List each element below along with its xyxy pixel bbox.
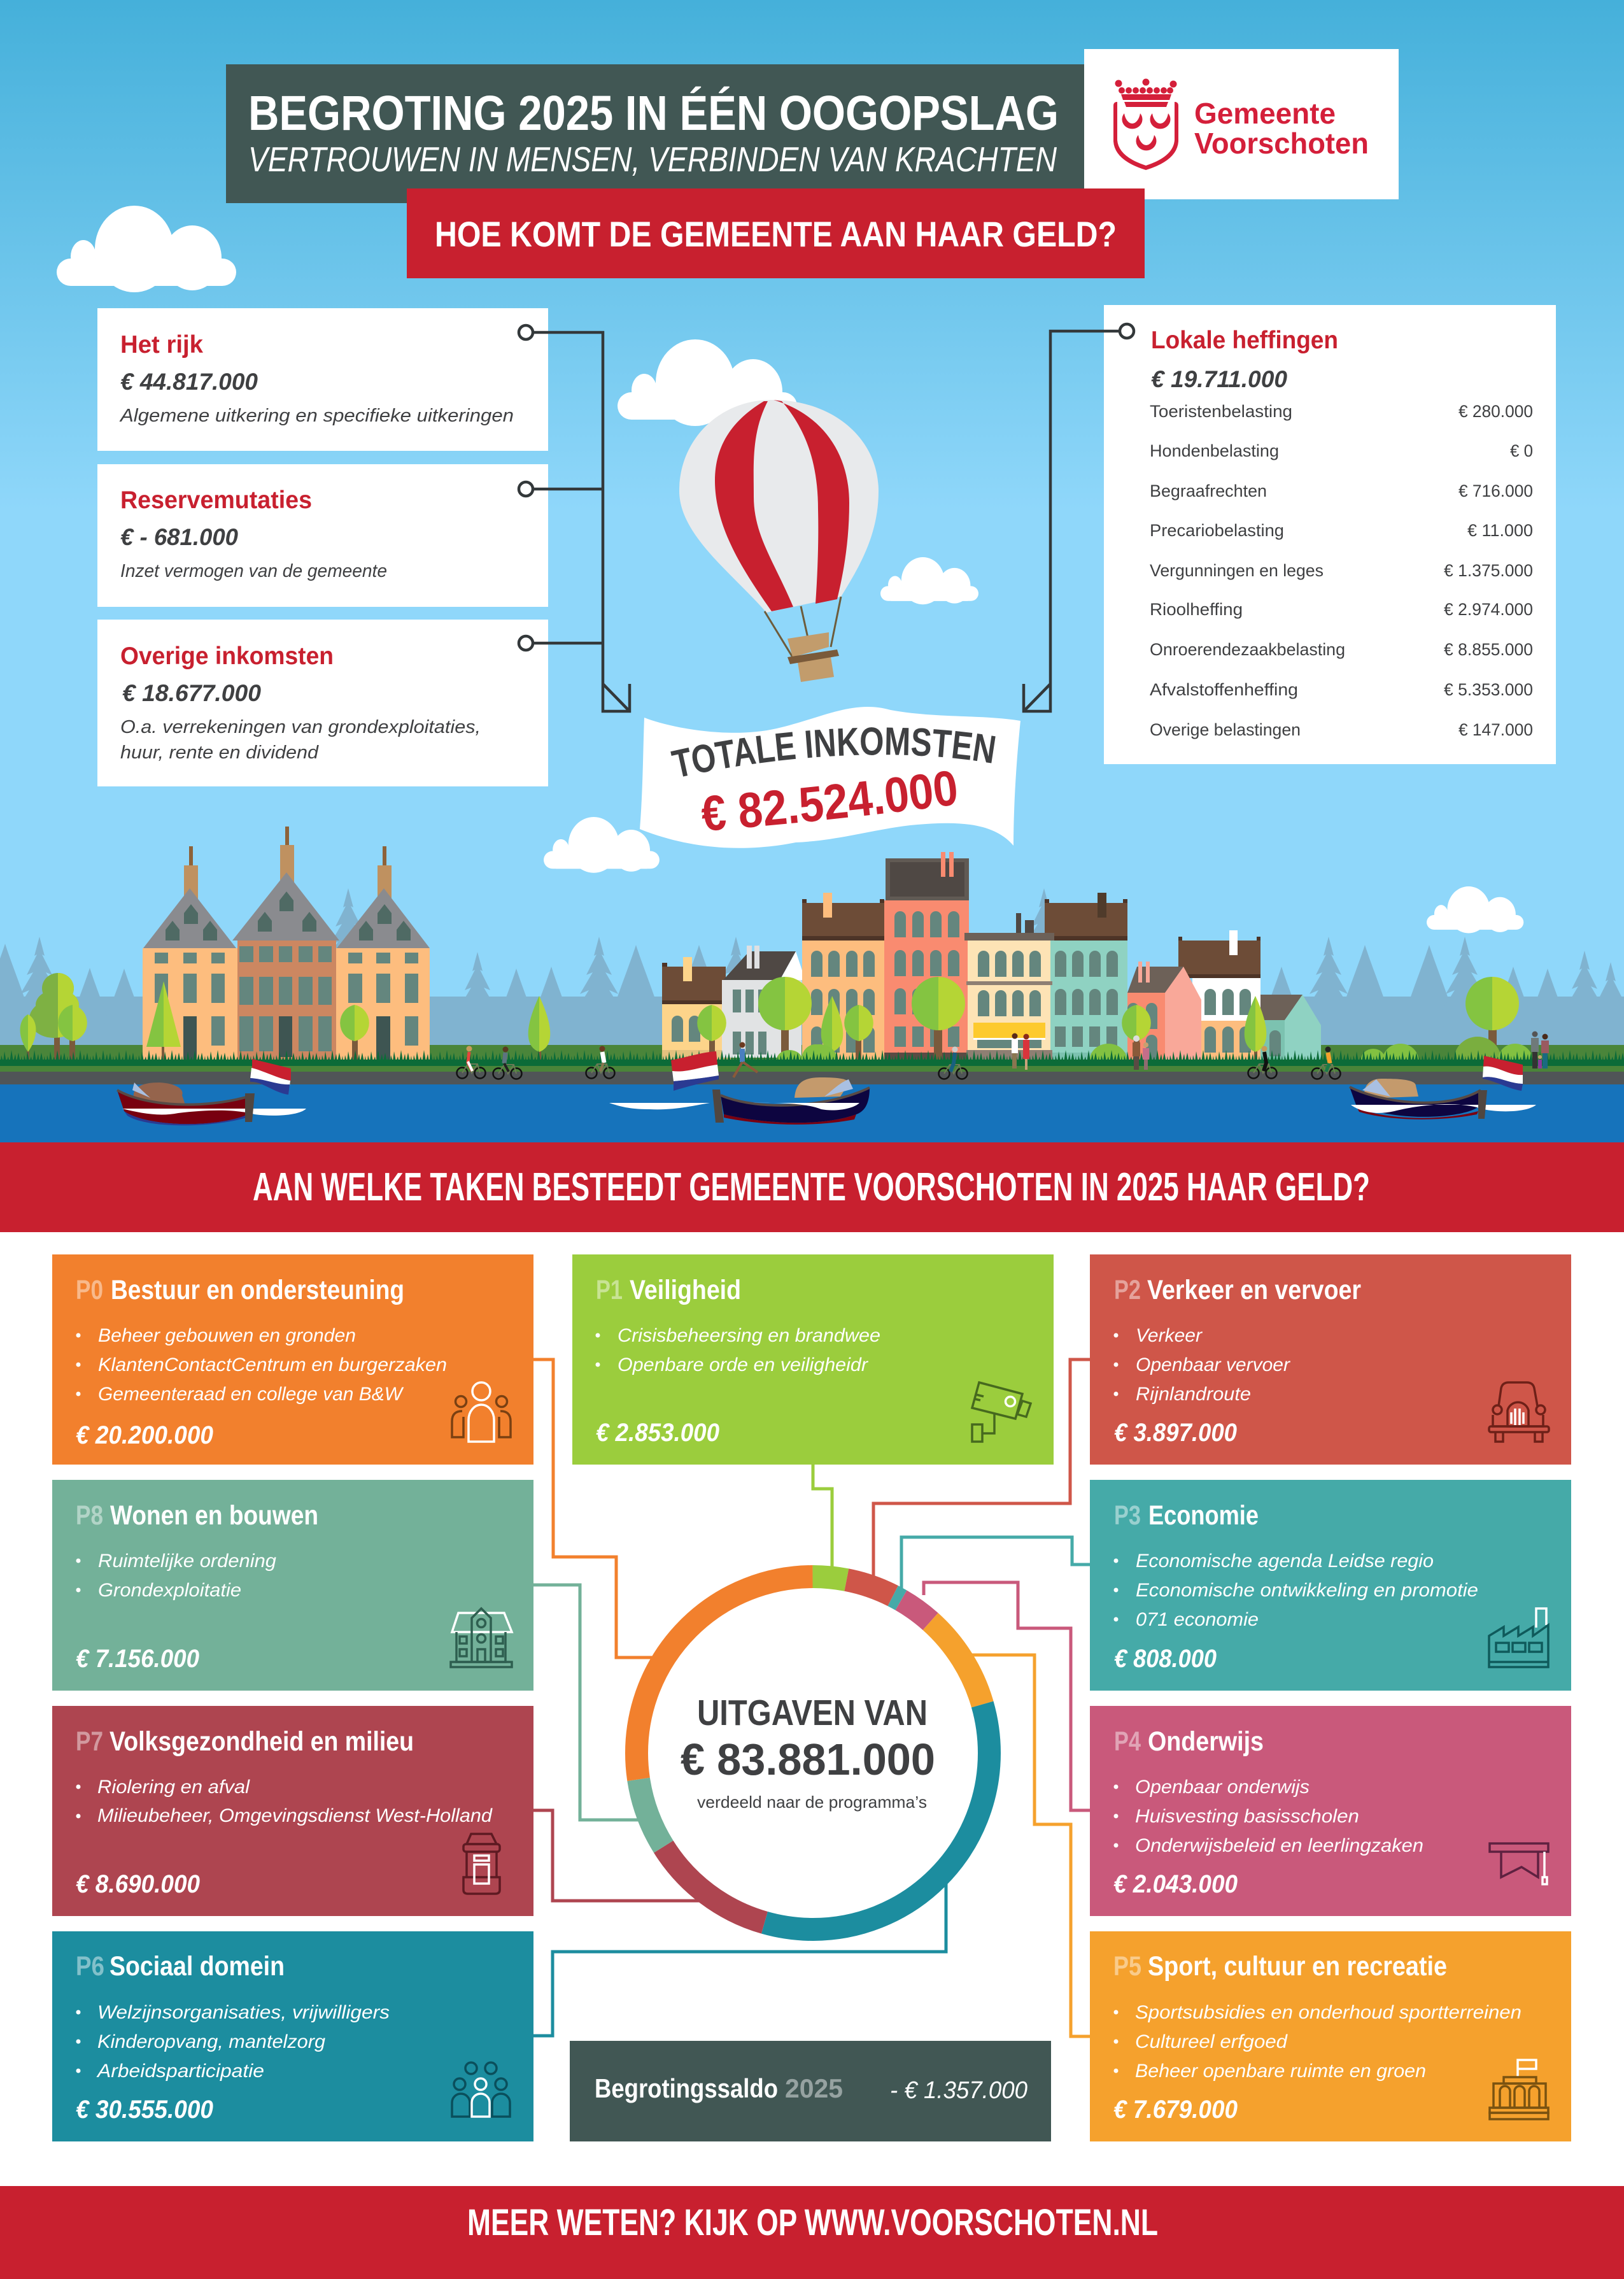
panel: P5 Sport, cultuur en recreatie: Sportsubsidies en onderhoud sportterreinen [1135, 2002, 1522, 2023]
banner: totale inkomsten: TOTALE INKOMSTEN [670, 727, 996, 777]
cyclist [1311, 1047, 1341, 1079]
panel: P4 Onderwijs: Openbaar onderwijs [1135, 1777, 1310, 1798]
panel: P8 Wonen en bouwen: Wonen en bouwen [110, 1500, 318, 1531]
panel: P0 Bestuur en ondersteuning: Bestuur en ondersteuning [111, 1275, 404, 1305]
panel: P7 Volksgezondheid en milieu: Volksgezondheid en milieu [109, 1726, 414, 1757]
panel: Lokale heffingen [1104, 305, 1556, 764]
house: salmon and pink [1127, 962, 1201, 1061]
panel: P4 Onderwijs: P4 [1114, 1726, 1141, 1757]
scene: castle [143, 827, 430, 1060]
panel: Overige inkomsten: O.a. verrekeningen van grondexploitaties, [120, 717, 481, 737]
panel: Overige inkomsten: Overige inkomsten [120, 643, 334, 670]
panel: P0 Bestuur en ondersteuning: Gemeenteraad en college van B&W [98, 1384, 404, 1405]
panel: P6 Sociaal domein: Sociaal domein [109, 1951, 285, 1982]
panel: P1 Veiligheid: € 2.853.000 [596, 1419, 719, 1447]
house: mint small [1260, 995, 1321, 1060]
panel: Lokale heffingen: € 1.375.000 [1444, 561, 1533, 580]
house: grey [722, 946, 803, 1058]
panel: begrotingssaldo: Begrotingssaldo [595, 2073, 778, 2103]
panel: P4 Onderwijs: Onderwijs [1148, 1726, 1264, 1757]
panel: P5 Sport, cultuur en recreatie: Sport, cultuur en recreatie [1148, 1951, 1447, 1982]
header: title block [226, 64, 1084, 203]
icon: mortarboard [1490, 1843, 1548, 1884]
panel: P3 Economie: Economie [1148, 1500, 1259, 1531]
panel: P6 Sociaal domein: € 30.555.000 [76, 2096, 213, 2124]
scene: water [0, 1084, 1624, 1142]
panel: Overige inkomsten: € 18.677.000 [122, 680, 261, 706]
icon: hot air balloon [679, 400, 879, 682]
panel: Overige inkomsten: huur, rente en dividend [120, 742, 319, 763]
icon: factory [1489, 1608, 1548, 1667]
panel: Overige inkomsten [97, 620, 548, 786]
panel: P2 Verkeer en vervoer: Rijnlandroute [1136, 1384, 1251, 1405]
panel: P5 Sport, cultuur en recreatie: P5 [1113, 1951, 1141, 1982]
panel: begrotingssaldo: 2025 [785, 2073, 843, 2103]
panel: Lokale heffingen: € 0 [1510, 441, 1533, 460]
scene: forest [0, 888, 1624, 1080]
panel: P4 Onderwijs: Huisvesting basisscholen [1135, 1806, 1359, 1827]
panel: Het rijk: Het rijk [120, 331, 203, 359]
scene: trees [20, 973, 1532, 1060]
boat: left with flag [117, 1059, 306, 1125]
panel: P2 Verkeer en vervoer: Verkeer en vervoer [1147, 1275, 1361, 1305]
panel: Lokale heffingen: Rioolheffing [1150, 600, 1243, 619]
panel: P0 Bestuur en ondersteuning: € 20.200.000 [76, 1421, 213, 1449]
panel: Lokale heffingen: € 147.000 [1458, 720, 1533, 739]
panel: P8 Wonen en bouwen: P8 [76, 1500, 103, 1531]
panel: Lokale heffingen: € 2.974.000 [1444, 600, 1533, 619]
cyclist [1248, 1046, 1277, 1079]
heading: income question: HOE KOMT DE GEMEENTE AAN HAAR GELD? [435, 214, 1117, 254]
scene: cyclists and pedestrians [457, 1032, 1549, 1079]
couple [1012, 1033, 1029, 1070]
panel: P1 Veiligheid: Crisisbeheersing en brandwee [618, 1325, 880, 1346]
panel: P6 Sociaal domein: Arbeidsparticipatie [96, 2061, 264, 2082]
panel: P7 Volksgezondheid en milieu: Riolering en afval [97, 1777, 250, 1798]
panel: Lokale heffingen: Overige belastingen [1150, 720, 1301, 739]
logo: Gemeente Voorschoten [1084, 49, 1399, 199]
panel: Reservemutaties: € - 681.000 [120, 524, 238, 550]
cloud: right of balloon [880, 557, 978, 604]
panel: P3 Economie: € 808.000 [1114, 1645, 1217, 1673]
panel: P0 Bestuur en ondersteuning [52, 1254, 533, 1465]
panel: Reservemutaties: Inzet vermogen van de gemeente [120, 561, 387, 581]
house: salmon tall [884, 852, 969, 1060]
bushes [777, 1037, 1532, 1083]
panel: P4 Onderwijs: Onderwijsbeleid en leerlingzaken [1135, 1835, 1423, 1856]
panel: Lokale heffingen: Lokale heffingen [1151, 327, 1338, 354]
family [1531, 1032, 1549, 1069]
panel: Lokale heffingen: Onroerendezaakbelasting [1150, 640, 1345, 659]
house: white and orange [1178, 930, 1260, 1060]
cyclist [938, 1047, 968, 1079]
panel: P3 Economie: Economische ontwikkeling en promotie [1136, 1580, 1478, 1601]
panel: P1 Veiligheid: Openbare orde en veiligheidr [618, 1354, 868, 1375]
cloud: far right [1427, 886, 1523, 933]
panel: P0 Bestuur en ondersteuning: Beheer gebouwen en gronden [98, 1325, 356, 1346]
donut chart: expenditure per programme [637, 1577, 989, 1929]
cloud: behind balloon [618, 339, 797, 426]
panel: begrotingssaldo: - € 1.357.000 [890, 2077, 1027, 2104]
panel: P5 Sport, cultuur en recreatie: € 7.679.000 [1113, 2096, 1238, 2124]
banner: totale inkomsten [640, 707, 1020, 848]
house: cream with awning [964, 933, 1054, 1060]
icon: post box [463, 1834, 500, 1894]
icon: group of people [452, 2062, 510, 2117]
boat: center with flag [609, 1051, 870, 1125]
panel: Lokale heffingen: Hondenbelasting [1150, 441, 1279, 460]
connectors: programme cards to ring [533, 1360, 1090, 2036]
footer band [0, 2186, 1624, 2279]
white content background [0, 1232, 1624, 2186]
header: title block: BEGROTING 2025 IN ÉÉN OOGOPSLAG [248, 86, 1059, 141]
panel: begrotingssaldo [570, 2041, 1051, 2141]
panel: P5 Sport, cultuur en recreatie: Beheer openbare ruimte en groen [1135, 2061, 1426, 2082]
cloud: top left [57, 206, 236, 292]
panel: P6 Sociaal domein [52, 1931, 533, 2141]
icon: security camera [972, 1382, 1031, 1442]
panel: Reservemutaties [97, 464, 548, 607]
panel: P5 Sport, cultuur en recreatie [1090, 1931, 1571, 2141]
footer band: MEER WETEN? KIJK OP WWW.VOORSCHOTEN.NL [467, 2202, 1158, 2243]
panel: P3 Economie [1090, 1480, 1571, 1691]
house: yellow [662, 957, 731, 1060]
donut chart: expenditure per programme: verdeeld naar de programma’s [697, 1793, 927, 1812]
icon: town hall with flag [1490, 2060, 1548, 2119]
panel: Het rijk: € 44.817.000 [120, 369, 258, 395]
panel: Lokale heffingen: € 280.000 [1458, 402, 1533, 421]
donut chart: expenditure per programme: € 83.881.000 [681, 1735, 935, 1784]
panel: P6 Sociaal domein: Kinderopvang, mantelzorg [97, 2031, 325, 2052]
panel: Lokale heffingen: Afvalstoffenheffing [1150, 680, 1298, 699]
panel: P3 Economie: P3 [1114, 1500, 1141, 1531]
panel: Lokale heffingen: € 11.000 [1467, 521, 1533, 540]
house: orange with brown roof [802, 893, 884, 1060]
panel: Lokale heffingen: € 5.353.000 [1444, 680, 1533, 699]
panel: P8 Wonen en bouwen: Ruimtelijke ordening [98, 1551, 276, 1572]
tree: left small [20, 1014, 36, 1052]
panel: Lokale heffingen: Begraafrechten [1150, 481, 1267, 501]
panel: Lokale heffingen: Vergunningen en leges [1150, 561, 1324, 580]
panel: P2 Verkeer en vervoer: P2 [1114, 1275, 1141, 1305]
heading band: spending question [0, 1142, 1624, 1232]
elderly couple [1133, 1035, 1149, 1070]
panel: P4 Onderwijs: € 2.043.000 [1113, 1870, 1238, 1898]
banner: totale inkomsten: € 82.524.000 [702, 770, 956, 830]
panel: P2 Verkeer en vervoer: Openbaar vervoer [1136, 1354, 1290, 1375]
panel: P4 Onderwijs [1090, 1706, 1571, 1916]
panel: P5 Sport, cultuur en recreatie: Cultureel erfgoed [1135, 2031, 1288, 2052]
panel: P3 Economie: Economische agenda Leidse regio [1136, 1551, 1434, 1572]
panel: Het rijk [97, 308, 548, 451]
panel: Lokale heffingen: € 8.855.000 [1444, 640, 1533, 659]
tree: left cluster back [29, 973, 79, 1038]
panel: P2 Verkeer en vervoer [1090, 1254, 1571, 1465]
panel: P8 Wonen en bouwen: € 7.156.000 [76, 1645, 199, 1673]
panel: P3 Economie: 071 economie [1136, 1609, 1259, 1630]
panel: P1 Veiligheid: P1 [596, 1275, 623, 1305]
boat: right with flag [1350, 1056, 1536, 1119]
cyclist [457, 1046, 485, 1079]
panel: P2 Verkeer en vervoer: Verkeer [1136, 1325, 1203, 1346]
logo: Gemeente Voorschoten: Voorschoten [1194, 127, 1369, 160]
runner [733, 1042, 758, 1077]
panel: P1 Veiligheid: Veiligheid [630, 1275, 741, 1305]
panel: P7 Volksgezondheid en milieu: € 8.690.000 [76, 1870, 200, 1898]
header: title block: VERTROUWEN IN MENSEN, VERBINDEN VAN KRACHTEN [248, 139, 1057, 179]
panel: Lokale heffingen: Precariobelasting [1150, 521, 1284, 540]
panel: Het rijk: Algemene uitkering en specifieke uitkeringen [119, 406, 514, 426]
scene: back field [0, 1045, 1624, 1070]
panel: P2 Verkeer en vervoer: € 3.897.000 [1114, 1419, 1237, 1447]
heading: income question [407, 188, 1145, 278]
panel: P6 Sociaal domein: Welzijnsorganisaties, vrijwilligers [97, 2002, 390, 2023]
panel: P8 Wonen en bouwen [52, 1480, 533, 1691]
house: mint with brown roof [1016, 893, 1127, 1060]
connector lines: income sources to banner [533, 331, 1119, 711]
scene: grass and path [0, 1047, 1624, 1084]
sky background [0, 0, 1624, 1089]
icon: house [451, 1608, 512, 1667]
panel: P0 Bestuur en ondersteuning: P0 [76, 1275, 103, 1305]
panel: P7 Volksgezondheid en milieu: P7 [76, 1726, 103, 1757]
cyclist [493, 1047, 522, 1079]
panel: Reservemutaties: Reservemutaties [120, 486, 312, 514]
panel: Lokale heffingen: € 19.711.000 [1151, 366, 1287, 392]
donut chart: expenditure per programme: UITGAVEN VAN [697, 1693, 928, 1733]
panel: Lokale heffingen: € 716.000 [1458, 481, 1533, 501]
icon: car [1489, 1382, 1549, 1442]
logo: Gemeente Voorschoten: Gemeente [1194, 97, 1336, 130]
cloud: under banner [544, 817, 660, 873]
cyclist [586, 1046, 615, 1079]
panel: P8 Wonen en bouwen: Grondexploitatie [98, 1580, 241, 1601]
scene: middle town houses [662, 852, 1321, 1061]
panel: P1 Veiligheid [572, 1254, 1054, 1465]
panel: P7 Volksgezondheid en milieu [52, 1706, 533, 1916]
panel: P0 Bestuur en ondersteuning: KlantenContactCentrum en burgerzaken [98, 1354, 447, 1375]
panel: P6 Sociaal domein: P6 [76, 1951, 104, 1982]
trees: round and poplar canopies [58, 977, 1492, 1052]
panel: P7 Volksgezondheid en milieu: Milieubeheer, Omgevingsdienst West-Holland [97, 1805, 493, 1826]
icon: people [452, 1382, 511, 1442]
panel: Lokale heffingen: Toeristenbelasting [1150, 402, 1292, 421]
